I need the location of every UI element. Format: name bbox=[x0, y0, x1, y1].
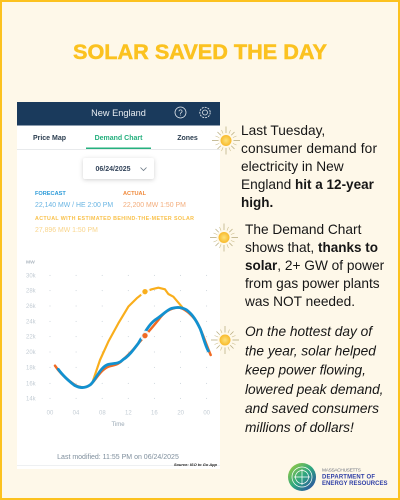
axis labels: 18k bbox=[26, 365, 36, 371]
axis labels bbox=[26, 260, 211, 416]
axis labels: 16k bbox=[26, 381, 36, 387]
actual line bbox=[55, 307, 211, 387]
callout: record demand: electricity in New bbox=[241, 159, 344, 174]
panel: app screenshot bbox=[17, 102, 220, 469]
icon: sun bbox=[211, 326, 239, 354]
marker: actual bbox=[140, 331, 150, 341]
chart footer: Source: ISO to Go App bbox=[174, 462, 218, 467]
forecast and actual readouts: ACTUAL WITH ESTIMATED BEHIND-THE-METER SOLAR bbox=[35, 216, 194, 222]
callout: demand chart: shows that, thanks to bbox=[245, 240, 378, 255]
axis labels: 14k bbox=[26, 396, 36, 402]
tabs bbox=[17, 135, 220, 150]
axis labels: 16 bbox=[151, 410, 158, 416]
callout: record demand: high. bbox=[241, 195, 273, 210]
callout: demand chart: was NOT needed. bbox=[244, 294, 355, 309]
axis labels: 20 bbox=[177, 410, 185, 416]
axis labels: 30k bbox=[26, 273, 36, 279]
callout: hottest day: keep power flowing, bbox=[245, 362, 366, 378]
forecast line bbox=[58, 307, 208, 388]
callout: hottest day: and saved consumers bbox=[245, 401, 379, 416]
axis labels: 20k bbox=[26, 350, 36, 356]
axis labels: 22k bbox=[26, 335, 36, 341]
axis labels: 00 bbox=[47, 410, 54, 416]
callout: record demand: England hit a 12-year bbox=[241, 177, 375, 192]
solar-adjusted line bbox=[93, 288, 182, 382]
axis labels: 28k bbox=[26, 289, 36, 295]
line chart bbox=[26, 260, 211, 416]
icon: sun bbox=[210, 224, 238, 252]
callout: record demand: consumer demand for bbox=[241, 141, 377, 156]
forecast and actual readouts: 22,200 MW 1:50 PM bbox=[123, 202, 186, 209]
forecast and actual readouts: 27,896 MW 1:50 PM bbox=[35, 227, 98, 234]
axis labels: 00 bbox=[203, 410, 211, 416]
callout: hottest day: millions of dollars! bbox=[245, 420, 354, 435]
callout: hottest day: the year, solar helped bbox=[245, 344, 376, 358]
logo: Massachusetts Department of Energy Resources: MASSACHUSETTS bbox=[322, 468, 361, 474]
callout: hottest day bbox=[211, 324, 384, 435]
callout: record demand: Last Tuesday, bbox=[241, 123, 325, 138]
axis labels: 24k bbox=[26, 319, 36, 325]
callout: demand chart: solar, 2+ GW of power bbox=[245, 258, 385, 273]
chart footer bbox=[17, 422, 220, 467]
app header bar: New England bbox=[91, 108, 146, 118]
date selector: 06/24/2025 bbox=[95, 166, 131, 173]
date selector bbox=[83, 158, 154, 179]
forecast and actual readouts: 22,140 MW / HE 2:00 PM bbox=[35, 202, 113, 209]
axis labels: 04 bbox=[73, 410, 80, 416]
chart footer: Last modified: 11:55 PM on 06/24/2025 bbox=[57, 454, 179, 461]
app header bar bbox=[17, 102, 220, 126]
logo: Massachusetts Department of Energy Resources: ENERGY RESOURCES bbox=[322, 481, 388, 487]
axis labels: 12 bbox=[125, 410, 132, 416]
title: SOLAR SAVED THE DAY bbox=[73, 41, 327, 64]
forecast and actual readouts: ACTUAL bbox=[123, 191, 147, 197]
forecast and actual readouts: FORECAST bbox=[35, 191, 66, 197]
callout: record demand bbox=[212, 123, 377, 210]
icon: sun bbox=[212, 126, 240, 154]
callout: demand chart: from gas power plants bbox=[245, 276, 380, 291]
app header bar: ? bbox=[178, 108, 183, 118]
chart footer: Time bbox=[111, 422, 125, 428]
axis labels: MW bbox=[26, 260, 35, 266]
logo emblem bbox=[288, 463, 316, 491]
logo: Massachusetts Department of Energy Resources bbox=[288, 463, 388, 491]
marker: solar-adjusted bbox=[140, 287, 150, 297]
tabs: Zones bbox=[177, 135, 198, 142]
callout: demand chart bbox=[210, 222, 385, 309]
callout: demand chart: The Demand Chart bbox=[245, 222, 362, 237]
forecast and actual readouts bbox=[35, 191, 194, 234]
axis labels: 08 bbox=[99, 410, 106, 416]
axis labels: 26k bbox=[26, 304, 36, 310]
callout: hottest day: lowered peak demand, bbox=[245, 382, 384, 397]
tabs: Demand Chart bbox=[95, 135, 143, 142]
logo: Massachusetts Department of Energy Resources: DEPARTMENT OF bbox=[322, 474, 375, 480]
tabs: Price Map bbox=[33, 135, 66, 142]
callout: hottest day: On the hottest day of bbox=[245, 324, 373, 339]
